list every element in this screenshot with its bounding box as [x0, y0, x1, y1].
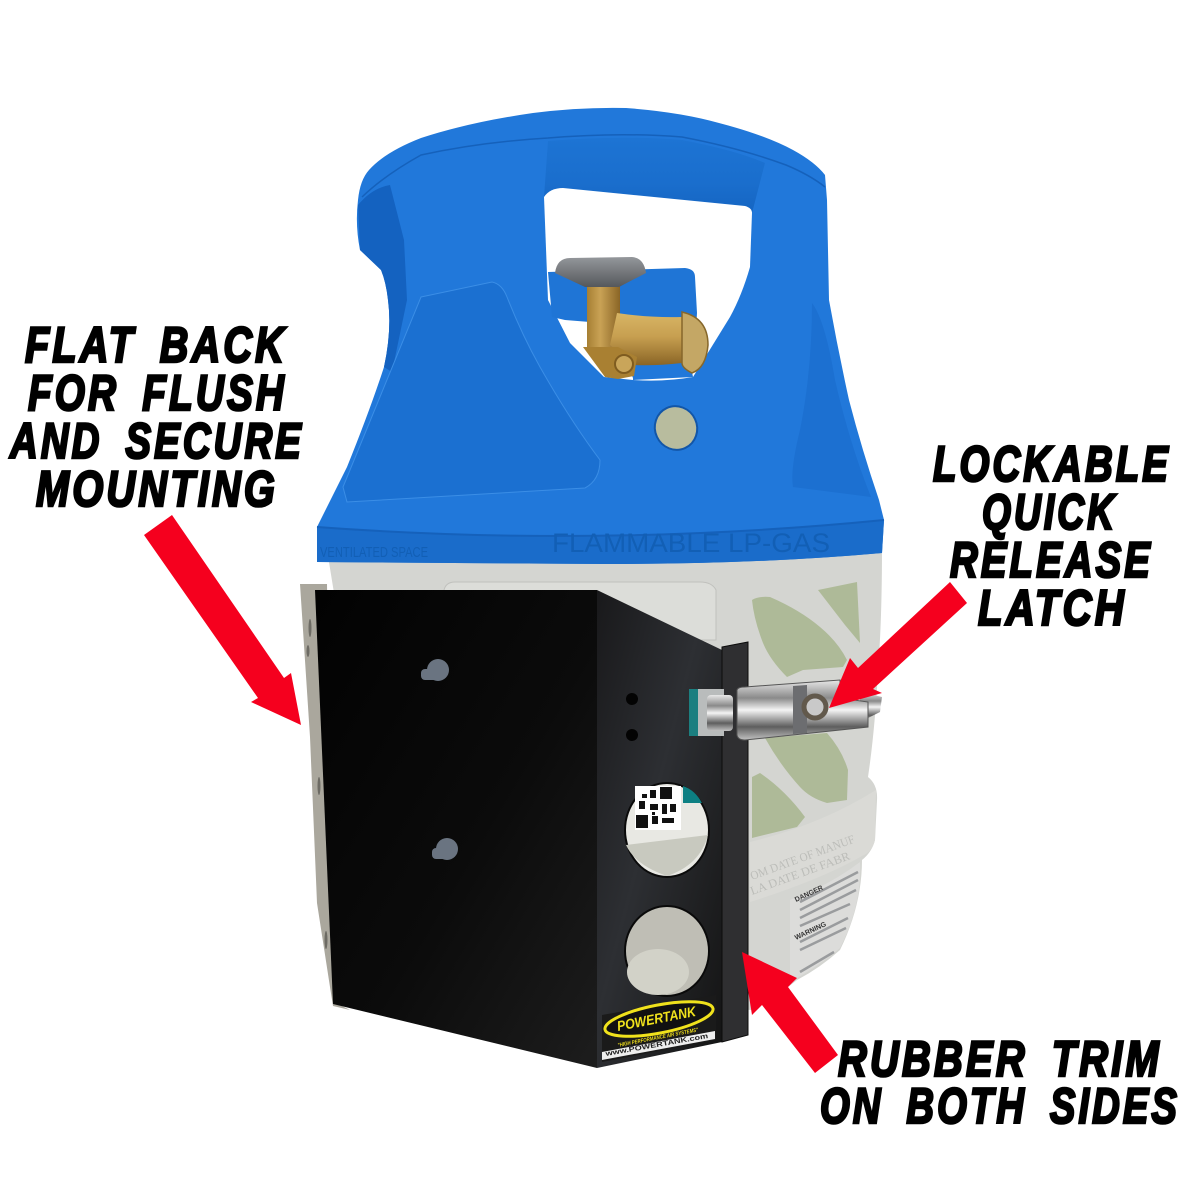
valve body base [583, 347, 637, 379]
powertank logo sticker [602, 995, 716, 1062]
label: flat back: FLAT BACK [25, 317, 287, 373]
mounting bracket [300, 584, 748, 1068]
band top highlight [317, 520, 884, 536]
powertank logo sticker: "HIGH PERFORMANCE AIR SYSTEMS" [617, 1027, 699, 1049]
back flange [300, 584, 350, 1010]
valve outlet [610, 313, 682, 365]
tank lower grey body [328, 548, 882, 1010]
embossed band text: FLAMMABLE LP-GAS [552, 528, 830, 558]
tank blue shroud [317, 108, 884, 564]
brass valve [555, 257, 708, 379]
label: rubber trim [820, 1031, 1180, 1134]
quick release latch [689, 680, 882, 740]
label: latch [933, 436, 1171, 636]
tank [317, 108, 884, 1010]
latch barrel [737, 680, 868, 740]
sight hole [648, 399, 704, 457]
valve stem [587, 285, 620, 347]
tank green composite windows [752, 582, 860, 838]
embossed band text [320, 528, 830, 561]
ring embossed date text: OM DATE OF MANUF [748, 832, 857, 883]
label: flat back [8, 317, 304, 517]
label: latch: QUICK [982, 484, 1117, 540]
label: flat back: MOUNTING [36, 461, 278, 517]
top rim seam [362, 135, 825, 197]
label: latch: LATCH [978, 580, 1127, 636]
tank lower ring [750, 790, 876, 902]
latch band [860, 692, 882, 722]
latch slot [793, 685, 807, 734]
mounting bolts [421, 659, 458, 860]
tank warning label: DANGER [794, 885, 824, 904]
latch hook [707, 695, 733, 731]
side small holes [626, 693, 638, 741]
lower round hole [625, 906, 709, 996]
rear lower piece [633, 362, 693, 380]
flange slots [306, 619, 328, 949]
shoulder moulded panel left [343, 282, 600, 502]
tank warning label [790, 862, 860, 982]
tank body label panel [444, 582, 716, 640]
arrow: flat back [144, 515, 301, 725]
side face [597, 590, 722, 1068]
upper round hole with qr code [625, 783, 709, 877]
ring embossed date text: LA DATE DE FABR [748, 849, 852, 898]
rear handle piece [548, 268, 697, 378]
base band [317, 520, 884, 564]
arrow: latch [829, 582, 967, 708]
powertank logo sticker: www.POWERTANK.com [604, 1033, 709, 1058]
latch teal plate [689, 689, 709, 736]
powertank logo sticker: POWERTANK [616, 1003, 698, 1034]
latch ring [804, 696, 826, 718]
front face [315, 590, 597, 1068]
handle window [544, 188, 752, 381]
valve relief port [615, 355, 633, 373]
embossed band text: VENTILATED SPACE [320, 544, 428, 561]
valve handwheel [555, 257, 646, 287]
rubber trim [722, 642, 748, 1042]
valve nut [682, 312, 708, 373]
tank warning label: WARNING [794, 921, 828, 942]
shoulder panel right [792, 303, 871, 497]
label: flat back: AND SECURE [8, 413, 304, 469]
label: flat back: FOR FLUSH [28, 365, 287, 421]
left shoulder shadow [358, 185, 407, 372]
arrow: rubber trim [742, 952, 838, 1073]
handle bar shading [544, 138, 765, 213]
